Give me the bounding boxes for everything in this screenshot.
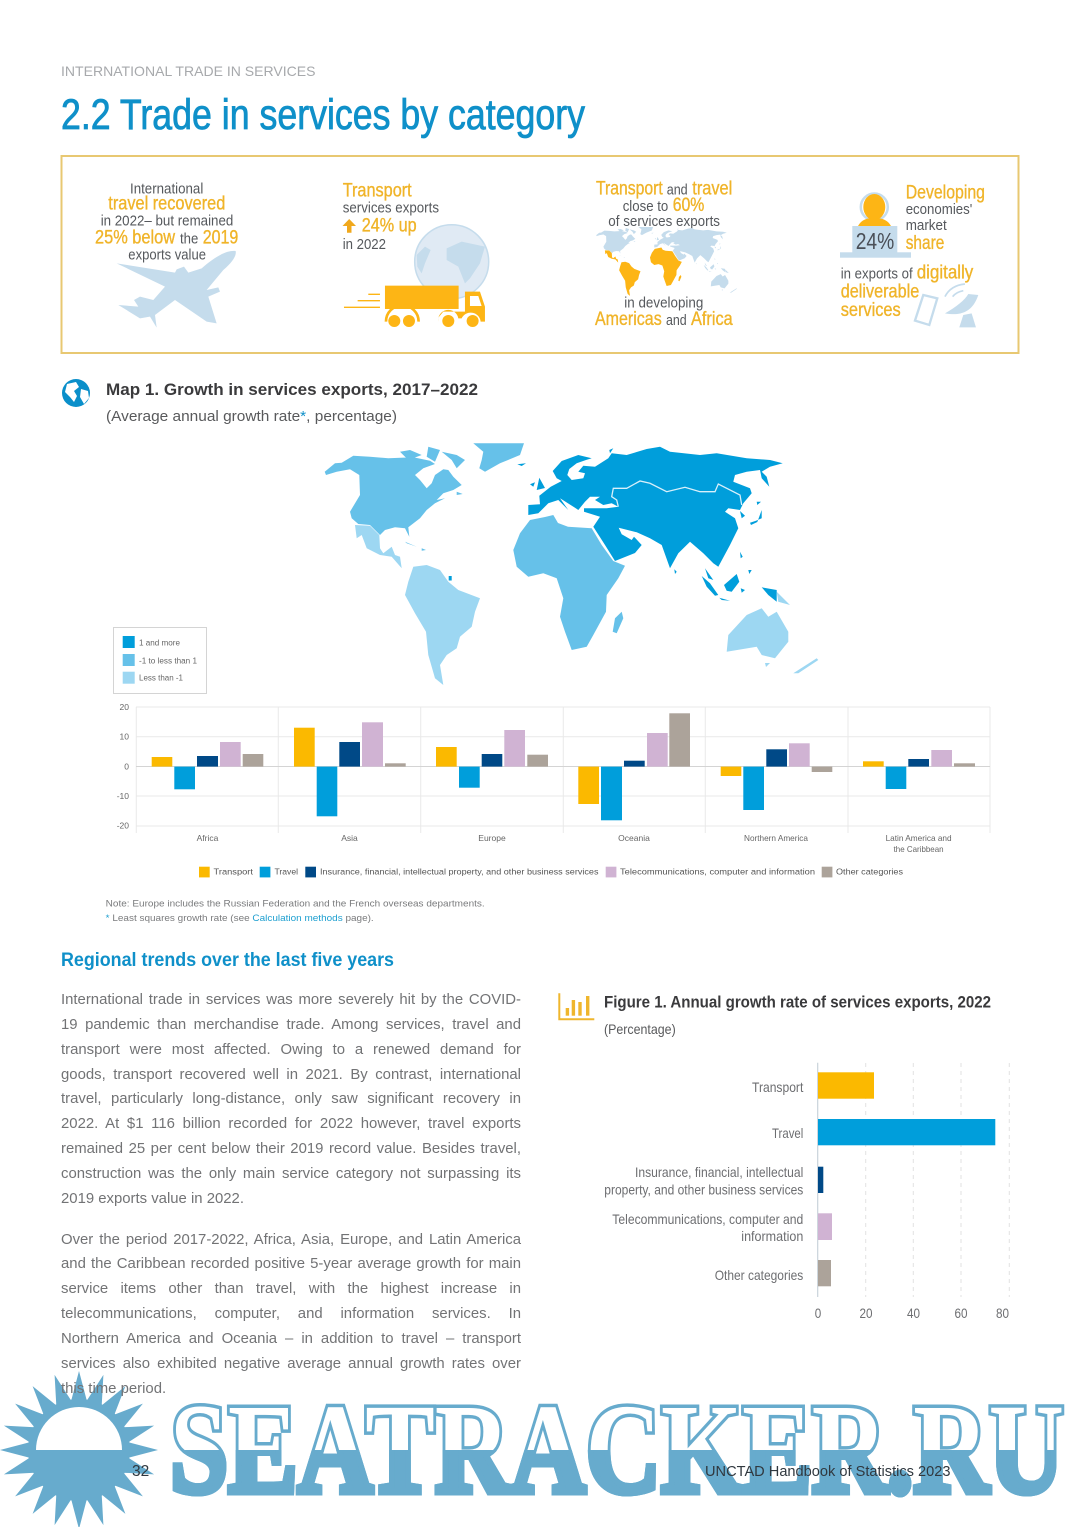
highlight: digitally deliverable services: services	[841, 300, 901, 321]
category labels: Transport	[752, 1079, 803, 1095]
body text: first paragraph: construction was the only main service category not surpassing its	[61, 1166, 521, 1182]
chart legend: Insurance, financial, intellectual property, and other business services	[320, 866, 598, 876]
region labels: Asia	[341, 833, 358, 843]
map legend: 1 and more	[139, 638, 181, 648]
watermark: wordmark	[172, 1403, 1064, 1498]
highlight: digitally deliverable services: market	[906, 217, 947, 234]
bar chart: growth by region and category	[117, 702, 990, 854]
category labels: property, and other business services	[604, 1182, 803, 1198]
notes: Note: Europe includes the Russian Federation and the French overseas departments.	[106, 898, 485, 910]
chart legend	[199, 866, 903, 877]
highlight: transport: Transport	[343, 181, 412, 202]
highlight: travel recovered: the	[180, 230, 198, 247]
icon: airplane	[117, 251, 236, 328]
highlight: developing Americas and Africa: close to	[623, 198, 668, 215]
region labels: the Caribbean	[894, 844, 944, 854]
body text: first paragraph: International trade in services was more severely hit by the COVID-	[61, 992, 521, 1008]
highlight: digitally deliverable services: share	[906, 233, 944, 254]
bars: Oceania	[578, 713, 690, 820]
title: 2.2 Trade in services by category	[61, 91, 585, 139]
highlight: developing Americas and Africa: Transport	[596, 178, 663, 199]
icon: up arrow	[342, 219, 356, 233]
highlight: developing Americas and Africa: of services exports	[608, 213, 720, 230]
notes: * Least squares growth rate (see Calculation methods page).	[106, 913, 374, 924]
highlight: transport: services exports	[343, 200, 439, 217]
highlight: developing Americas and Africa: in developing	[624, 295, 703, 312]
watermark: sun	[0, 1371, 158, 1527]
icon: globe	[62, 379, 90, 407]
section heading: Regional trends over the last five years	[61, 950, 394, 971]
x axis labels: 0	[815, 1305, 821, 1321]
x axis labels: 40	[907, 1305, 920, 1321]
icon: truck	[344, 286, 485, 327]
notes	[106, 898, 485, 924]
map heading: Map 1. Growth in services exports, 2017–2022	[106, 380, 478, 399]
chart legend: Transport	[214, 866, 254, 876]
icon: phone and satellite dish	[915, 284, 978, 327]
y axis labels: 20	[120, 702, 129, 712]
highlight: developing Americas and Africa: Americas	[595, 309, 662, 330]
highlight: travel recovered: 2019	[203, 227, 238, 248]
map legend: -1 to less than 1	[139, 656, 198, 666]
highlight: digitally deliverable services: deliverable	[841, 281, 919, 302]
category labels	[604, 1079, 803, 1283]
icon: call-centre agent with laptop	[840, 194, 911, 258]
bar chart: annual growth rate by category	[604, 1063, 1009, 1321]
x axis labels	[815, 1305, 1009, 1321]
y axis labels	[117, 702, 129, 831]
map subheading: (Average annual growth rate *, percentage)	[106, 408, 397, 425]
highlight: digitally deliverable services: economies'	[906, 201, 972, 218]
y axis labels: 0	[124, 761, 129, 771]
region labels: Europe	[478, 833, 506, 843]
body text: first paragraph: travel, particularly long-distance, only saw significant recovery in	[61, 1091, 521, 1107]
figure heading: Figure 1. Annual growth rate of services exports, 2022	[604, 993, 991, 1012]
chart legend: Telecommunications, computer and information	[620, 866, 815, 876]
highlight: developing Americas and Africa	[595, 178, 737, 330]
highlight: transport	[342, 181, 489, 327]
region labels	[197, 833, 952, 854]
x axis labels: 80	[996, 1305, 1009, 1321]
body text: first paragraph: remained 25 per cent below their 2019 record value. Besides travel,	[61, 1141, 521, 1157]
bars: Africa	[152, 742, 263, 789]
highlight: digitally deliverable services: Developing	[906, 182, 985, 203]
body text: second paragraph: Over the period 2017-2022, Africa, Asia, Europe, and Latin America	[61, 1232, 521, 1248]
category labels: Other categories	[715, 1267, 803, 1283]
body text: second paragraph: service items other than travel, with the highest increase in	[61, 1281, 521, 1297]
bars: Northern America	[721, 743, 832, 810]
highlight: digitally deliverable services: in exports of	[841, 265, 913, 282]
highlight: travel recovered: exports value	[128, 246, 206, 263]
chart legend: Other categories	[836, 866, 903, 876]
publication name: UNCTAD Handbook of Statistics 2023	[705, 1464, 950, 1480]
region labels: Africa	[197, 833, 219, 843]
category labels: Travel	[772, 1125, 803, 1141]
highlight: travel recovered	[95, 180, 238, 328]
highlight: digitally deliverable services: 24%	[856, 228, 894, 254]
page number: 32	[132, 1463, 149, 1480]
body text: first paragraph	[61, 992, 521, 1207]
bars: Latin America and the Caribbean	[863, 750, 975, 789]
icon: bar chart	[559, 993, 594, 1019]
y axis labels: -20	[117, 821, 129, 831]
highlight: digitally deliverable services: digitally	[917, 262, 974, 283]
body text: first paragraph: transport were most affected. Owing to a renewed demand for	[61, 1042, 521, 1058]
highlight: transport: 24% up	[362, 216, 417, 237]
highlight: travel recovered: 25% below	[95, 227, 175, 248]
highlight: transport: in 2022	[343, 236, 386, 253]
body text: second paragraph: this time period.	[61, 1381, 166, 1397]
category labels: Telecommunications, computer and	[612, 1211, 803, 1227]
body text: second paragraph: and the Caribbean recorded positive 5-year average growth for main	[61, 1256, 521, 1272]
map legend	[114, 628, 206, 694]
y axis labels: -10	[117, 791, 129, 801]
figure subheading: (Percentage)	[604, 1021, 676, 1037]
bars: Europe	[436, 730, 548, 788]
highlight: travel recovered: International	[130, 180, 203, 197]
highlight: travel recovered: in 2022– but remained	[101, 213, 233, 230]
choropleth world map	[325, 443, 818, 685]
map legend: Less than -1	[139, 674, 184, 682]
body text: first paragraph: 19 pandemic than merchandise trade. Among services, travel and	[61, 1017, 521, 1033]
bars: Asia	[294, 722, 406, 816]
body text: second paragraph: Northern America and Oceania – in addition to travel – transport	[61, 1331, 521, 1347]
region labels: Northern America	[744, 833, 808, 843]
y axis labels: 10	[120, 732, 129, 742]
body text: first paragraph: 2019 exports value in 2022.	[61, 1191, 244, 1207]
body text: first paragraph: 2022. At $1 116 billion recorded for 2022 however, travel exports	[61, 1116, 521, 1132]
highlight: developing Americas and Africa: and	[667, 181, 688, 198]
section label: INTERNATIONAL TRADE IN SERVICES	[61, 63, 316, 79]
panel: key highlights	[62, 156, 1018, 353]
highlight: developing Americas and Africa: Africa	[691, 309, 733, 330]
body text: first paragraph: goods, transport recovered well in 2021. By contrast, international	[61, 1067, 521, 1083]
category labels: information	[741, 1228, 803, 1244]
body text: second paragraph: services also exhibited negative average annual growth rates over	[61, 1356, 521, 1372]
category labels: Insurance, financial, intellectual	[635, 1164, 803, 1180]
icon: globe	[415, 225, 489, 299]
x axis labels: 60	[954, 1305, 968, 1321]
highlight: developing Americas and Africa: travel	[692, 178, 732, 199]
highlight: developing Americas and Africa: 60%	[673, 195, 704, 216]
highlight: developing Americas and Africa: and	[666, 312, 687, 329]
icon: mini world map	[596, 227, 737, 296]
highlight: digitally deliverable services	[840, 182, 985, 327]
body text: second paragraph	[61, 1232, 522, 1397]
chart legend: Travel	[274, 866, 298, 876]
region labels: Oceania	[618, 833, 650, 843]
highlight: travel recovered: travel recovered	[108, 193, 225, 214]
region labels: Latin America and	[886, 833, 952, 843]
x axis labels: 20	[860, 1305, 873, 1321]
body text: second paragraph: telecommunications, computer, and information services. In	[61, 1306, 521, 1322]
